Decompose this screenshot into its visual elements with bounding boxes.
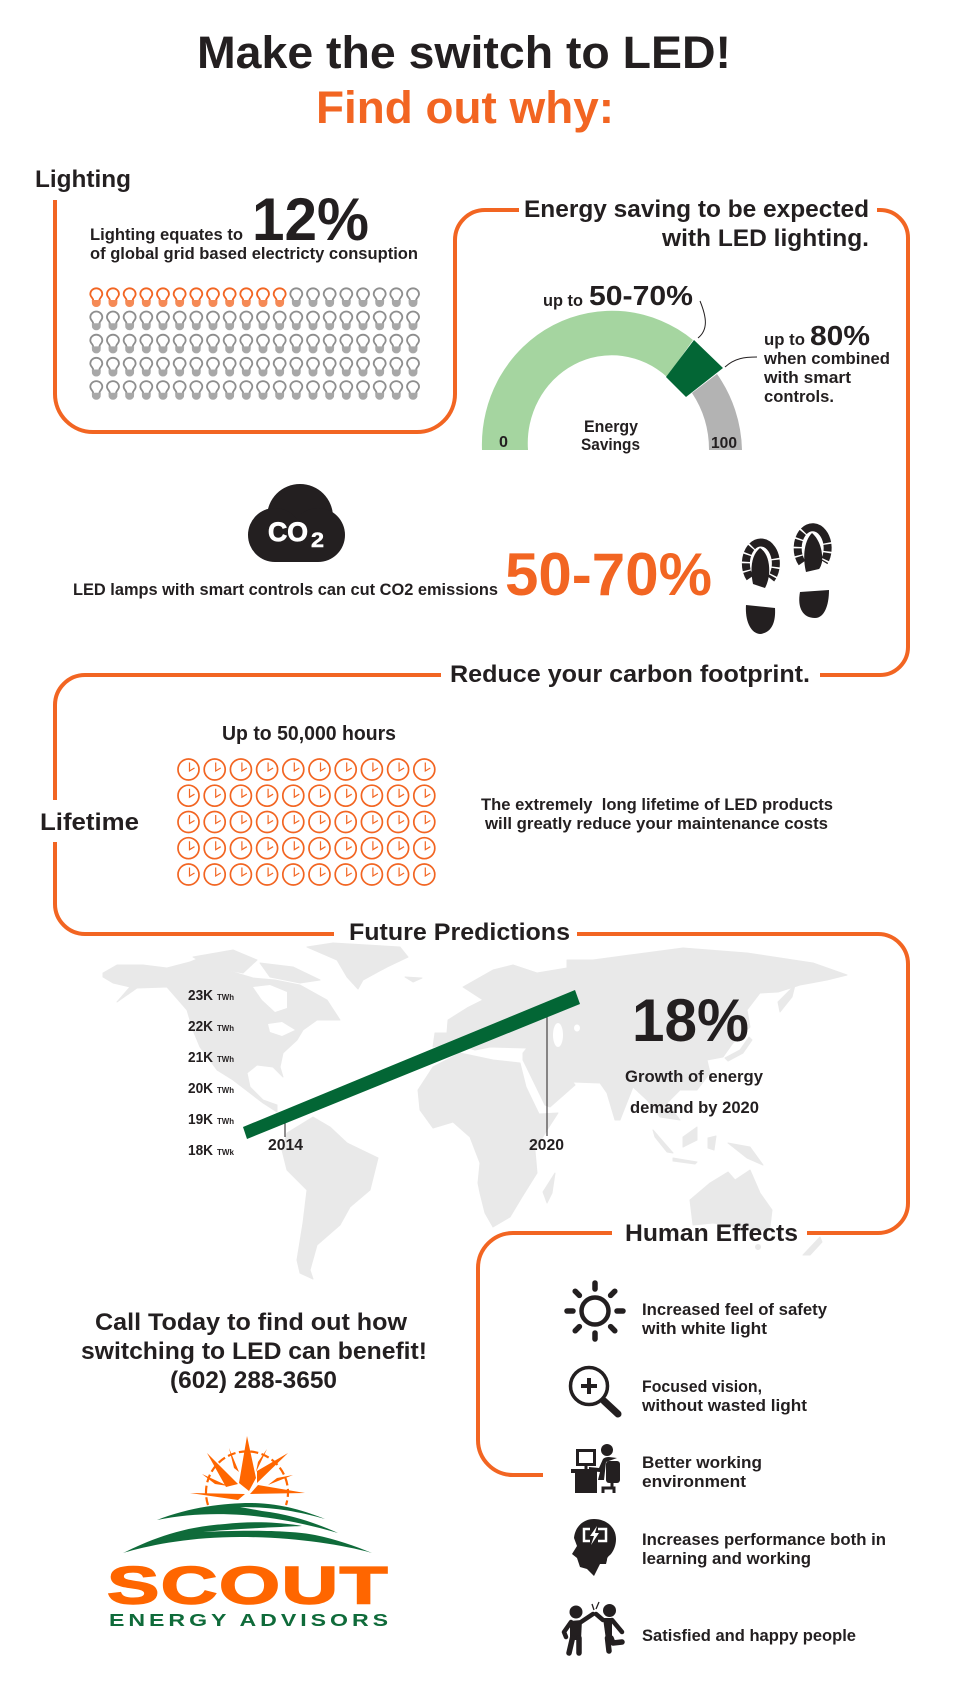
title (197, 27, 731, 133)
big stat: 18 percent: demand by 2020 (630, 1099, 759, 1117)
axis labels: TWh: 20K (188, 1080, 213, 1097)
icon: CO2 cloud: 2 (311, 529, 324, 552)
axis labels: TWh: TWh (217, 1085, 234, 1095)
call to action (81, 1309, 427, 1394)
frame line: human effects (478, 1233, 612, 1475)
lighting statistic text: of global grid based electricty consuption (90, 245, 418, 263)
heading: energy saving: Energy saving to be expected (524, 196, 869, 223)
axis labels: TWh: 18K (188, 1142, 213, 1159)
text: performance (642, 1531, 886, 1568)
icon: CO2 cloud (248, 484, 345, 562)
logo: wordmark: ENERGY ADVISORS (109, 1610, 392, 1630)
text: lifetime description: The extremely long lifetime of LED products (481, 796, 833, 814)
heading: lifetime: Lifetime (40, 809, 139, 836)
big stat: 50-70 percent: 50-70% (505, 541, 712, 608)
axis labels: TWh: 19K (188, 1111, 213, 1128)
axis labels: TWh: TWh (217, 1023, 234, 1033)
gauge labels: 0 (499, 434, 508, 451)
frame line: energy to carbon (820, 210, 908, 675)
icon: office worker (571, 1444, 620, 1493)
axis labels: TWh: 22K (188, 1018, 213, 1035)
year labels: 2020 (529, 1137, 564, 1154)
text: safety: with white light (641, 1320, 768, 1338)
pictogram: 100 bulbs, 12 lit (88, 286, 419, 400)
year labels: 2014 (268, 1137, 303, 1154)
label: up to 50,000 hours: Up to 50,000 hours (222, 723, 396, 745)
lighting statistic text (90, 186, 418, 263)
lighting statistic text: Lighting equates to (90, 226, 243, 244)
heading: lighting: Lighting (35, 166, 131, 193)
text: focused vision (641, 1378, 808, 1415)
icon: CO2 cloud: CO (268, 517, 308, 547)
call to action: Call Today to find out how (95, 1309, 407, 1336)
text: safety: Increased feel of safety (642, 1301, 828, 1319)
text: happy people: Satisfied and happy people (642, 1627, 856, 1645)
year labels (268, 1137, 564, 1154)
frame line: lighting to energy (55, 200, 519, 432)
gauge labels (499, 418, 737, 454)
gauge labels: 100 (711, 435, 737, 452)
text: focused vision: Focused vision, (642, 1378, 762, 1396)
callout: up to 80 percent: up to (764, 330, 805, 349)
gauge: 50-70 percent band (482, 311, 693, 450)
heading: energy saving: with LED lighting. (661, 225, 869, 252)
gauge labels: Energy (584, 418, 639, 436)
map water cut-outs (253, 985, 580, 1047)
call to action: switching to LED can benefit! (81, 1338, 427, 1365)
callout: up to 80 percent: controls. (764, 388, 834, 406)
axis labels: TWh: 21K (188, 1049, 213, 1066)
text: working environment (642, 1454, 762, 1491)
title: Make the switch to LED! (197, 27, 731, 78)
axis labels: TWh: 23K (188, 987, 213, 1004)
world map background (103, 943, 847, 1279)
gauge labels: Savings (581, 436, 640, 454)
text: performance: Increases performance both in (642, 1531, 886, 1549)
text: safety (641, 1301, 828, 1338)
callout: up to 50-70 percent: 50-70% (589, 280, 693, 311)
icon: magnifier (570, 1368, 618, 1414)
callout: up to 80 percent (725, 320, 890, 406)
axis labels: TWh: TWk (217, 1147, 234, 1157)
logo: green swooshes (123, 1503, 372, 1553)
text: working environment: environment (642, 1473, 747, 1491)
axis labels: TWh: TWh (217, 1054, 234, 1064)
icon: footprints (746, 527, 829, 634)
big stat: 18 percent: 18% (632, 987, 749, 1054)
heading: future predictions: Future Predictions (349, 919, 570, 946)
text: performance: learning and working (642, 1550, 811, 1568)
logo: wordmark: SCOUT (107, 1556, 389, 1616)
logo: wordmark (107, 1556, 392, 1630)
heading: reduce carbon footprint: Reduce your carbon footprint. (450, 661, 810, 688)
big stat: 18 percent: Growth of energy (625, 1068, 764, 1086)
heading: human effects: Human Effects (625, 1220, 798, 1247)
lighting statistic text: 12% (252, 186, 369, 253)
big stat: 18 percent (625, 987, 764, 1117)
icon: head with battery (572, 1519, 616, 1576)
frame line: future predictions (577, 934, 908, 1233)
logo: Scout Energy Advisors (107, 1436, 392, 1630)
heading: energy saving (524, 196, 869, 252)
callout: up to 50-70 percent (543, 280, 705, 338)
gauge: remaining grey (692, 374, 742, 450)
title: Find out why: (316, 82, 614, 133)
text: CO2 emissions: LED lamps with smart controls can cut CO2 emissions (73, 581, 498, 599)
axis labels: TWh: TWh (217, 1116, 234, 1126)
gauge chart: energy savings (482, 311, 742, 454)
pictogram: clocks (178, 759, 435, 885)
callout: up to 80 percent: 80% (810, 320, 870, 351)
icon: sun (567, 1283, 623, 1339)
icon: people high five (564, 1602, 622, 1653)
text: working environment: Better working (642, 1454, 762, 1472)
gauge: 80 percent band (666, 340, 723, 397)
trend bar (243, 990, 580, 1139)
call to action: (602) 288-3650 (170, 1367, 337, 1394)
line chart: energy demand growth (188, 987, 580, 1159)
axis labels: TWh (188, 987, 234, 1159)
text: lifetime description: will greatly reduce your maintenance costs (484, 815, 828, 833)
logo: compass sun (190, 1436, 305, 1505)
text: focused vision: without wasted light (641, 1397, 808, 1415)
axis labels: TWh: TWh (217, 992, 234, 1002)
text: lifetime description (481, 796, 833, 833)
frame line: lifetime (55, 675, 441, 934)
callout: up to 80 percent: with smart (763, 369, 852, 387)
callout: up to 50-70 percent: up to (543, 291, 583, 310)
callout: up to 80 percent: when combined (763, 350, 890, 368)
